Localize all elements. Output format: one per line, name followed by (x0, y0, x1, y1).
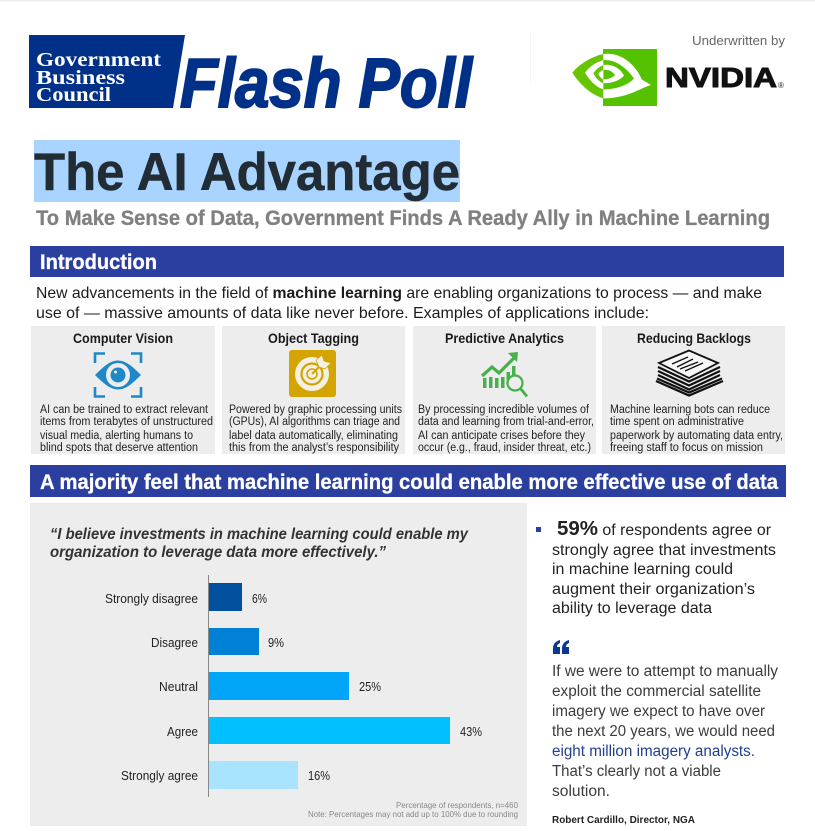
panel: Object Tagging: label data automatically, eliminating (229, 430, 398, 442)
bar chart: 16% (308, 769, 330, 783)
panel: Predictive Analytics (413, 326, 596, 454)
bar chart: 43% (460, 725, 482, 739)
panel: Computer Vision: blind spots that deserve attention (40, 442, 198, 454)
icon: quotation mark (553, 640, 569, 654)
panel: Computer Vision: Computer Vision (73, 330, 173, 346)
key statistic text (552, 518, 776, 617)
panel: Predictive Analytics: Predictive Analytics (445, 330, 564, 346)
intro text (36, 285, 762, 322)
section banner: Introduction: Introduction (40, 251, 157, 274)
panel: Computer Vision: AI can be trained to extract relevant (40, 404, 209, 416)
key statistic text: in machine learning could (552, 561, 733, 578)
logo: NVIDIA: NVIDIA (665, 62, 777, 93)
panel: Reducing Backlogs (602, 326, 785, 454)
quote attribution: Robert Cardillo, Director, NGA (552, 814, 695, 826)
panel: Computer Vision: visual media, alerting humans to (40, 430, 193, 442)
bar chart: 9% (268, 636, 284, 650)
logo wordmark: Flash Poll: Flash Poll (180, 44, 473, 122)
panel: Reducing Backlogs: paperwork by automating data entry, (610, 430, 783, 442)
quote text: If we were to attempt to manually (552, 663, 778, 680)
panel: Object Tagging: (GPUs), AI algorithms can triage and (229, 416, 400, 428)
panel: Predictive Analytics: data and learning from trial-and-error, (418, 416, 594, 428)
chart question: organization to leverage data more effectively.” (50, 544, 386, 561)
key statistic text: ability to leverage data (552, 600, 712, 617)
icon: eye (95, 354, 141, 396)
chart question: “I believe investments in machine learning could enable my (50, 526, 469, 543)
chart footnote: Note: Percentages may not add up to 100% due to rounding (308, 809, 518, 819)
chart footnote: Percentage of respondents, n=460 (396, 800, 518, 810)
logo: Government Business Council: Business (36, 67, 125, 89)
key statistic text: strongly agree that investments (552, 542, 776, 559)
intro text: use of — massive amounts of data like never before. Examples of applications include: (36, 305, 649, 322)
bar chart: Neutral (159, 679, 198, 694)
quote text: the next 20 years, we would need (552, 723, 775, 740)
quote text: eight million imagery analysts. (552, 743, 755, 760)
key statistic text: augment their organization’s (552, 581, 755, 598)
title highlight (34, 140, 460, 202)
panel: Predictive Analytics: occur (e.g., fraud, insider threat, etc.) (418, 442, 591, 454)
icon: target (289, 350, 336, 397)
bullet marker (536, 527, 541, 532)
subtitle: To Make Sense of Data, Government Finds A Ready Ally in Machine Learning (36, 207, 770, 230)
panel: Predictive Analytics: By processing incredible volumes of (418, 404, 590, 416)
quote text: imagery we expect to have over (552, 703, 765, 720)
chart footnote (308, 800, 518, 819)
section banner: majority finding: A majority feel that machine learning could enable more effective use of data (40, 471, 778, 494)
panel: Object Tagging: Object Tagging (268, 330, 359, 346)
panel: survey chart (30, 503, 527, 826)
panel: Computer Vision (31, 326, 215, 454)
panel: Object Tagging: Powered by graphic processing units (229, 404, 402, 416)
section banner: Introduction (30, 246, 784, 277)
bar chart (105, 575, 482, 797)
quote text: That’s clearly not a viable (552, 763, 721, 780)
bar chart: 25% (359, 680, 381, 694)
section banner: majority finding (30, 465, 786, 497)
logo: NVIDIA: ® (778, 81, 784, 90)
bar chart: Agree (167, 724, 198, 739)
quote text (552, 663, 778, 800)
logo: Government Business Council: Government (36, 49, 161, 71)
panel: Object Tagging (222, 326, 405, 454)
bar chart: Disagree (151, 635, 198, 650)
panel: Computer Vision: items from terabytes of unstructured (40, 416, 213, 428)
logo: Government Business Council (29, 35, 185, 108)
key statistic text: 59% of respondents agree or (557, 518, 771, 540)
panel: Reducing Backlogs: Reducing Backlogs (637, 330, 751, 346)
quote text: solution. (552, 783, 610, 800)
panel: Predictive Analytics: AI can anticipate crises before they (418, 430, 585, 442)
bar chart: 6% (252, 592, 267, 606)
logo: NVIDIA (572, 49, 784, 106)
panel: Reducing Backlogs: time spent on administrative (610, 416, 744, 428)
bar chart: Strongly agree (121, 768, 198, 783)
panel: Object Tagging: this from the analyst’s responsibility (229, 442, 399, 454)
icon: paper stack (656, 350, 723, 396)
logo: Government Business Council: Council (36, 84, 111, 106)
chart question (50, 526, 469, 561)
icon: growth chart with magnifier (482, 352, 527, 396)
title: The AI Advantage (34, 143, 460, 202)
quote text: exploit the commercial satellite (552, 683, 761, 700)
panel: Reducing Backlogs: freeing staff to focus on mission (610, 442, 763, 454)
sponsor label: Underwritten by (692, 33, 786, 48)
bar chart: Strongly disagree (105, 591, 198, 606)
intro text: New advancements in the field of machine learning are enabling organizations to process — and make (36, 285, 762, 302)
panel: Reducing Backlogs: Machine learning bots can reduce (610, 404, 770, 416)
